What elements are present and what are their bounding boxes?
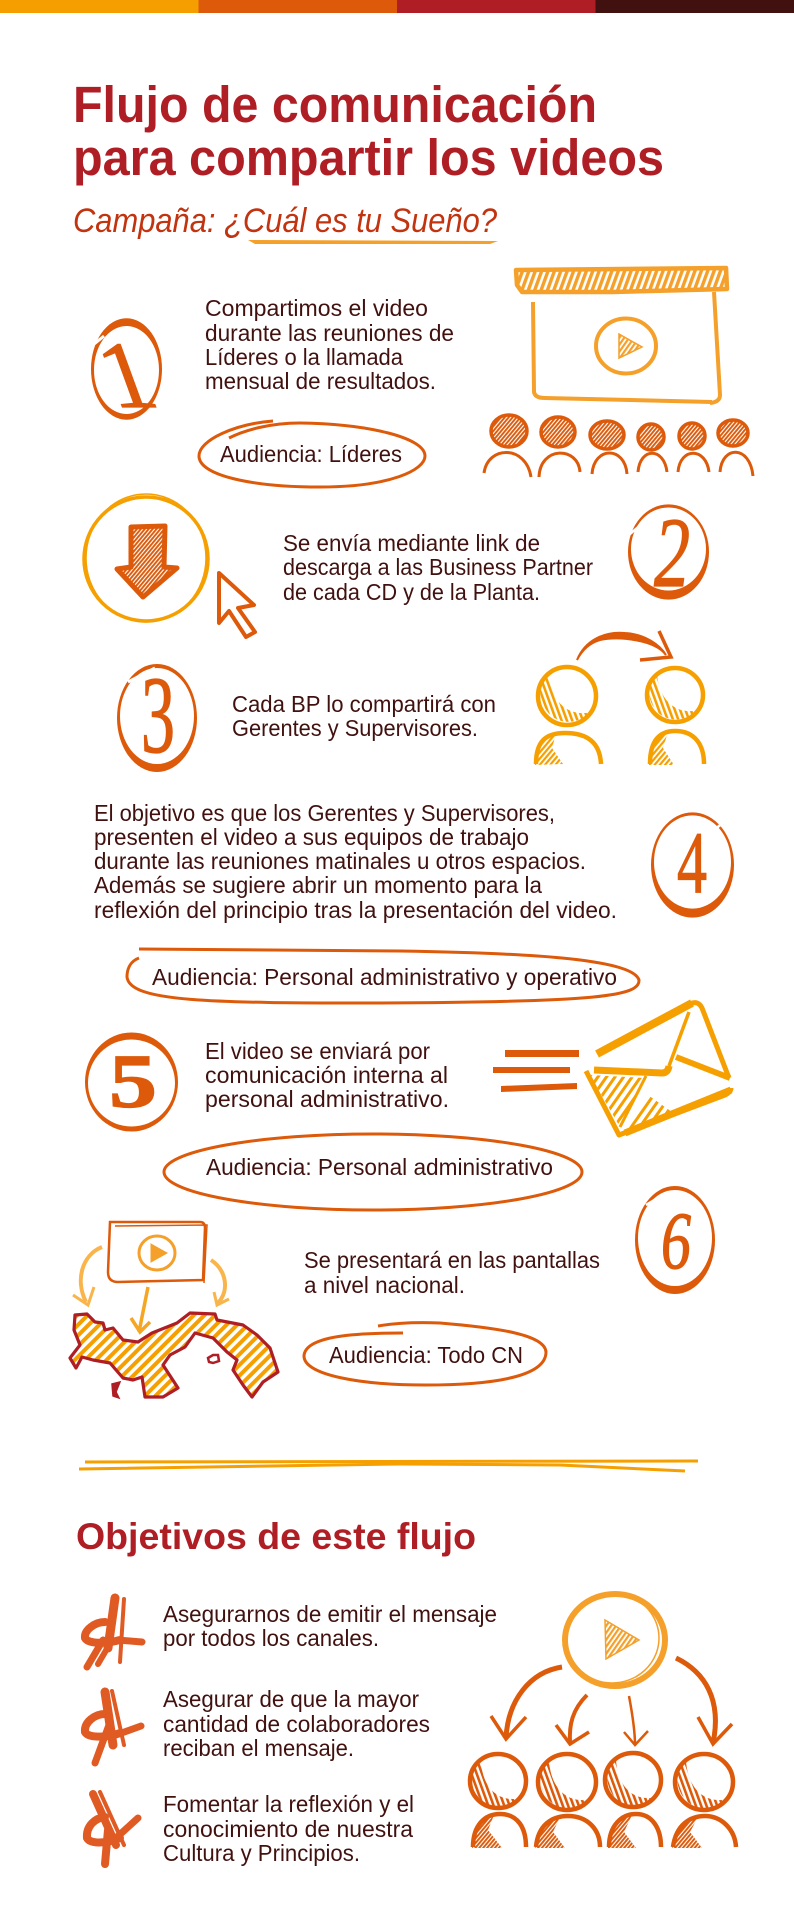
step 3 text: Gerentes y Supervisores. — [232, 715, 478, 741]
team of four people — [470, 1753, 736, 1848]
objective 2 text — [163, 1686, 430, 1761]
audience pill: Todo CN: Audiencia: Todo CN — [329, 1342, 523, 1368]
step 3 text: Cada BP lo compartirá con — [232, 691, 496, 717]
objective 2 text: Asegurar de que la mayor — [163, 1686, 419, 1712]
objective 1 text: por todos los canales. — [163, 1625, 379, 1651]
step 1 text — [205, 295, 454, 394]
audience pill: Líderes — [199, 421, 425, 487]
step 5 — [85, 1003, 731, 1210]
step 2 — [84, 494, 709, 637]
step 5 text: El video se enviará por — [205, 1038, 430, 1064]
audience pill: administrative staff: Audiencia: Personal administrativo — [206, 1154, 553, 1180]
step 2 text: de cada CD y de la Planta. — [283, 579, 540, 605]
objective 3 — [87, 1791, 414, 1866]
objective 3 text — [163, 1791, 414, 1866]
title: para compartir los videos — [73, 129, 664, 186]
step 1 text: Compartimos el video — [205, 295, 428, 321]
icon: brush star — [87, 1792, 138, 1864]
number 2 badge: 2 — [654, 497, 690, 608]
step 1 text: mensual de resultados. — [205, 368, 436, 394]
step 4 text: durante las reuniones matinales u otros espacios. — [94, 848, 586, 874]
audience pill: administrative staff — [164, 1134, 582, 1210]
step 4 text: Además se sugiere abrir un momento para la — [94, 872, 542, 898]
step 6 text: Se presentará en las pantallas — [304, 1247, 600, 1273]
play circle — [565, 1593, 665, 1686]
icon: audience of six people — [484, 415, 753, 477]
objective 3 text: conocimiento de nuestra — [163, 1816, 413, 1842]
divider strokes — [79, 1461, 698, 1471]
step 1 text: durante las reuniones de — [205, 320, 454, 346]
objective 1 — [85, 1598, 497, 1667]
objective 2 text: reciban el mensaje. — [163, 1735, 354, 1761]
top colour bar — [0, 0, 794, 13]
objective 2 — [85, 1686, 430, 1763]
number 6 badge: 6 — [661, 1195, 691, 1286]
step 3 text — [232, 691, 496, 741]
audience pill: Todo CN — [304, 1323, 546, 1385]
icon: small video screen — [108, 1222, 207, 1283]
step 5 text: personal administrativo. — [205, 1086, 449, 1112]
objective 3 text: Fomentar la reflexión y el — [163, 1791, 414, 1817]
step 5 text: comunicación interna al — [205, 1062, 448, 1088]
step 6 text: a nivel nacional. — [304, 1272, 465, 1298]
number 3 badge — [117, 654, 197, 776]
title: Flujo de comunicación — [73, 76, 597, 133]
number 3 badge: 3 — [141, 654, 175, 776]
step 4 — [94, 800, 734, 1003]
map of Panama — [70, 1313, 278, 1398]
icon: download circle with arrow — [84, 494, 208, 622]
heading: objectives: Objetivos de este flujo — [76, 1516, 476, 1557]
number 4 badge: 4 — [677, 815, 707, 912]
icon: brush star — [85, 1691, 141, 1763]
arrows toward the map — [73, 1247, 229, 1332]
audience pill: Líderes: Audiencia: Líderes — [220, 441, 402, 467]
number 6 badge — [635, 1186, 715, 1294]
icon: envelope — [586, 1003, 731, 1135]
step 2 text: Se envía mediante link de — [283, 530, 540, 556]
icon: speed lines — [493, 1050, 579, 1092]
objective 2 text: cantidad de colaboradores — [163, 1711, 430, 1737]
step 4 text: presenten el video a sus equipos de trabajo — [94, 824, 529, 850]
step 2 text — [283, 530, 593, 605]
step 3 — [117, 631, 704, 776]
icon: play button sending to team — [470, 1593, 736, 1848]
arrows down to the team — [491, 1658, 732, 1745]
icon: brush star — [85, 1598, 142, 1667]
objective 3 text: Cultura y Principios. — [163, 1840, 360, 1866]
step 6 — [70, 1186, 715, 1398]
icon: video screen — [516, 268, 727, 403]
step 1 — [84, 268, 753, 487]
step 4 text: El objetivo es que los Gerentes y Supervisores, — [94, 800, 555, 826]
icon: cursor — [219, 573, 255, 637]
number 4 badge — [651, 812, 734, 918]
step 2 text: descarga a las Business Partner — [283, 554, 593, 580]
objective 1 text — [163, 1601, 497, 1651]
audience pill: administrative and operative staff — [127, 949, 639, 1003]
icon: two people with sharing arrow — [535, 631, 704, 765]
number 1 badge: 1 — [84, 324, 169, 428]
step 6 text — [304, 1247, 600, 1298]
number 5 badge: 5 — [109, 1040, 157, 1124]
title — [73, 76, 664, 186]
objective 1 text: Asegurarnos de emitir el mensaje — [163, 1601, 497, 1627]
subtitle with underline: Campaña: ¿Cuál es tu Sueño? — [73, 202, 497, 240]
step 5 text — [205, 1038, 449, 1112]
step 4 text: reflexión del principio tras la presentación del video. — [94, 897, 617, 923]
number 2 badge — [628, 497, 709, 608]
number 5 badge — [85, 1032, 178, 1132]
step 1 text: Líderes o la llamada — [205, 344, 403, 370]
step 4 text — [94, 800, 617, 923]
audience pill: administrative and operative staff: Audiencia: Personal administrativo y operativo — [152, 964, 617, 990]
